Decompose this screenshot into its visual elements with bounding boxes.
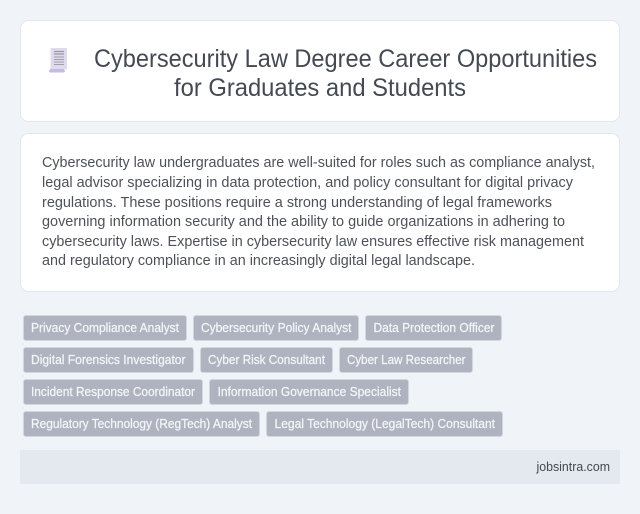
text block: description: governing information security and the ability to guide organizations in adhering to	[42, 214, 565, 230]
tag: Regulatory Technology (RegTech) Analyst	[24, 412, 260, 436]
panel: description card	[20, 134, 620, 292]
tag: Incident Response Coordinator: Incident Response Coordinator	[31, 384, 196, 399]
footer text: source: jobsintra.com	[536, 459, 610, 474]
tag: Data Protection Officer	[366, 316, 502, 340]
text block: description: Cybersecurity law undergraduates are well-suited for roles such as compliance analyst,	[42, 155, 595, 171]
tag: Incident Response Coordinator	[24, 380, 202, 404]
tag: Cybersecurity Policy Analyst	[194, 316, 358, 340]
title	[94, 45, 597, 102]
tag: Cyber Risk Consultant: Cyber Risk Consultant	[208, 352, 325, 367]
tag: Cyber Risk Consultant	[200, 348, 332, 372]
tag list: career roles	[24, 316, 502, 436]
title: Cybersecurity Law Degree Career Opportunities	[94, 45, 597, 73]
panel: header card	[20, 20, 620, 122]
tag: Privacy Compliance Analyst	[24, 316, 186, 340]
tag: Digital Forensics Investigator	[24, 348, 194, 372]
tag: Legal Technology (LegalTech) Consultant	[266, 412, 502, 436]
text block: description	[42, 155, 595, 269]
tag: Privacy Compliance Analyst: Privacy Compliance Analyst	[31, 320, 179, 335]
text block: description: and regulatory compliance in an increasingly digital legal landscape.	[42, 253, 475, 269]
title: for Graduates and Students	[174, 74, 466, 102]
footer bar	[20, 450, 620, 484]
tag: Digital Forensics Investigator: Digital Forensics Investigator	[31, 352, 186, 367]
tag: Cybersecurity Policy Analyst: Cybersecurity Policy Analyst	[201, 320, 352, 335]
text block: description: legal advisor specializing in data protection, and policy consultant for digital privacy	[42, 175, 574, 191]
tag: Regulatory Technology (RegTech) Analyst: Regulatory Technology (RegTech) Analyst	[31, 416, 252, 431]
tag: Legal Technology (LegalTech) Consultant: Legal Technology (LegalTech) Consultant	[274, 416, 495, 431]
tag: Information Governance Specialist: Information Governance Specialist	[218, 384, 401, 399]
tag: Information Governance Specialist	[210, 380, 408, 404]
tag: Data Protection Officer: Data Protection Officer	[374, 320, 495, 335]
text block: description: cybersecurity laws. Expertise in cybersecurity law ensures effective risk management	[42, 234, 584, 250]
tag: Cyber Law Researcher	[340, 348, 472, 372]
text block: description: regulations. These positions require a strong understanding of legal frameworks	[42, 195, 552, 211]
tag: Cyber Law Researcher: Cyber Law Researcher	[347, 352, 466, 367]
icon: document scroll	[49, 48, 67, 72]
